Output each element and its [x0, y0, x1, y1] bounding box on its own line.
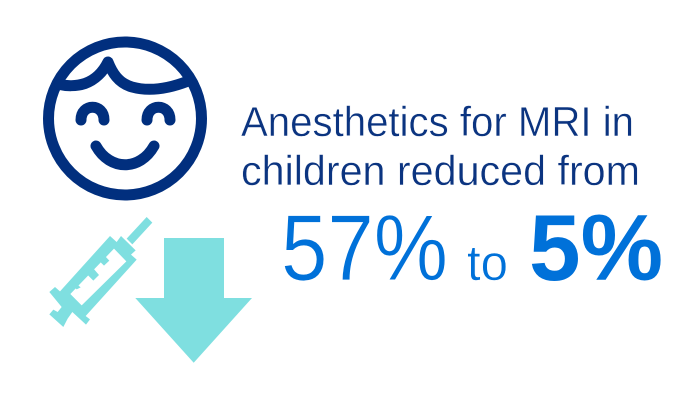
heading — [241, 98, 640, 194]
icon: syringe — [49, 217, 152, 327]
heading: Anesthetics for MRI in — [241, 98, 634, 145]
icon: smiling child face — [48, 42, 202, 195]
heading: children reduced from — [241, 147, 640, 194]
statistic: 57% to 5%: 5% — [529, 195, 663, 300]
statistic: 57% to 5%: to — [467, 235, 508, 291]
statistic: 57% to 5%: 57% — [281, 195, 448, 300]
statistic: 57% to 5% — [281, 195, 663, 300]
icon: down arrow — [135, 238, 252, 363]
